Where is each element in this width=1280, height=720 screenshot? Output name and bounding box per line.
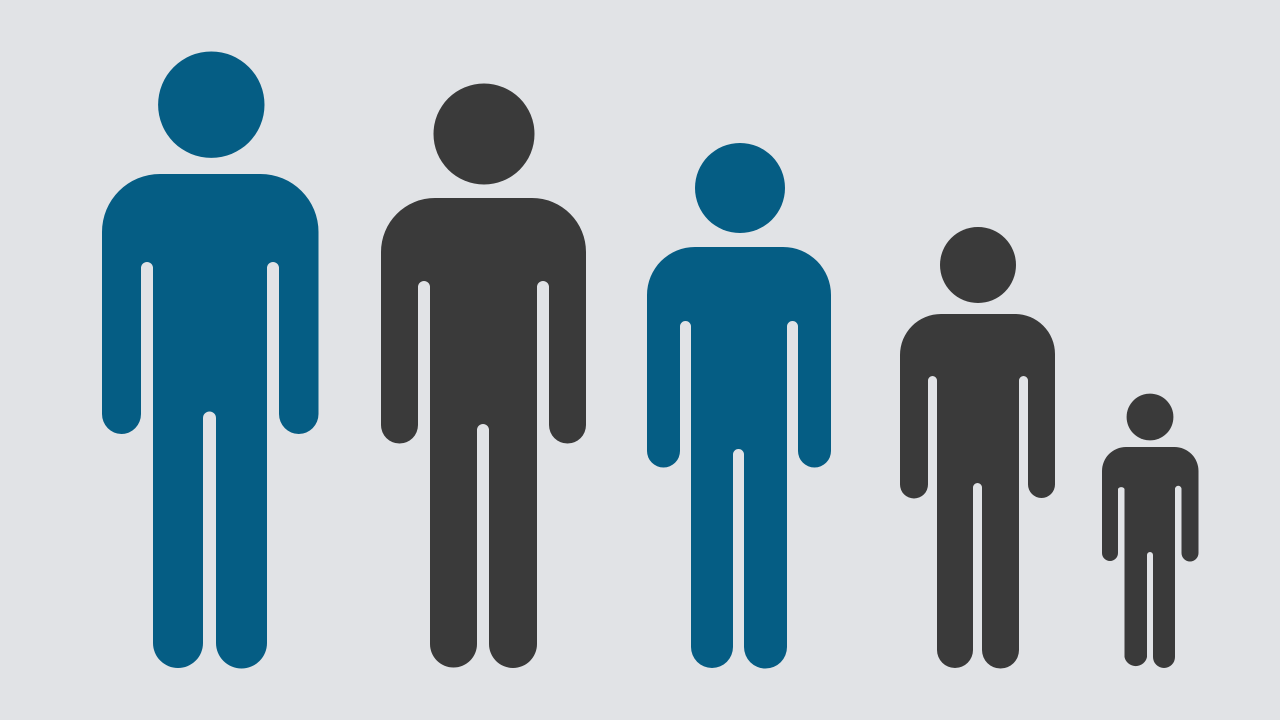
figure 3: middle, blue [647, 143, 831, 668]
figure 5: smallest, dark grey [1102, 394, 1198, 668]
figure 4: fourth, dark grey [900, 227, 1055, 668]
figure 2: second tallest, dark grey [381, 84, 586, 668]
figure 1: tallest, blue [102, 51, 318, 668]
